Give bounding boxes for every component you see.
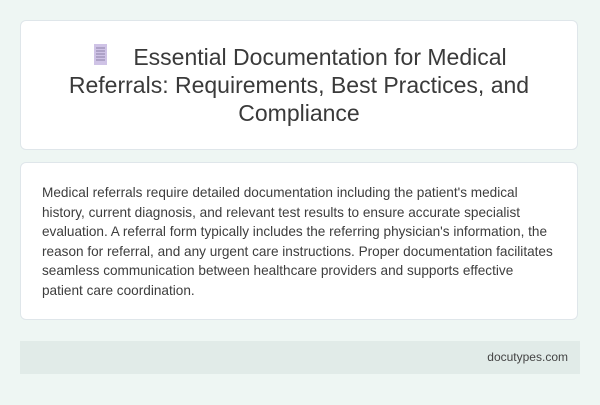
description text: Medical referrals require detailed documentation including the patient's medical history, current diagnosis, and relevant test results to ensure accurate specialist evaluation. A referral form typically includes the referring physician's information, the reason for referral, and any urgent care instructions. Proper documentation facilitates seamless communication between healthcare providers and supports effective patient care coordination.	[42, 185, 553, 298]
title heading: Essential Documentation for Medical Referrals: Requirements, Best Practices, and Compliance	[69, 44, 529, 126]
description card	[20, 162, 578, 320]
footer	[20, 341, 580, 374]
footer: docutypes.com	[487, 350, 568, 364]
title card	[20, 20, 578, 150]
icon: document	[94, 44, 107, 65]
